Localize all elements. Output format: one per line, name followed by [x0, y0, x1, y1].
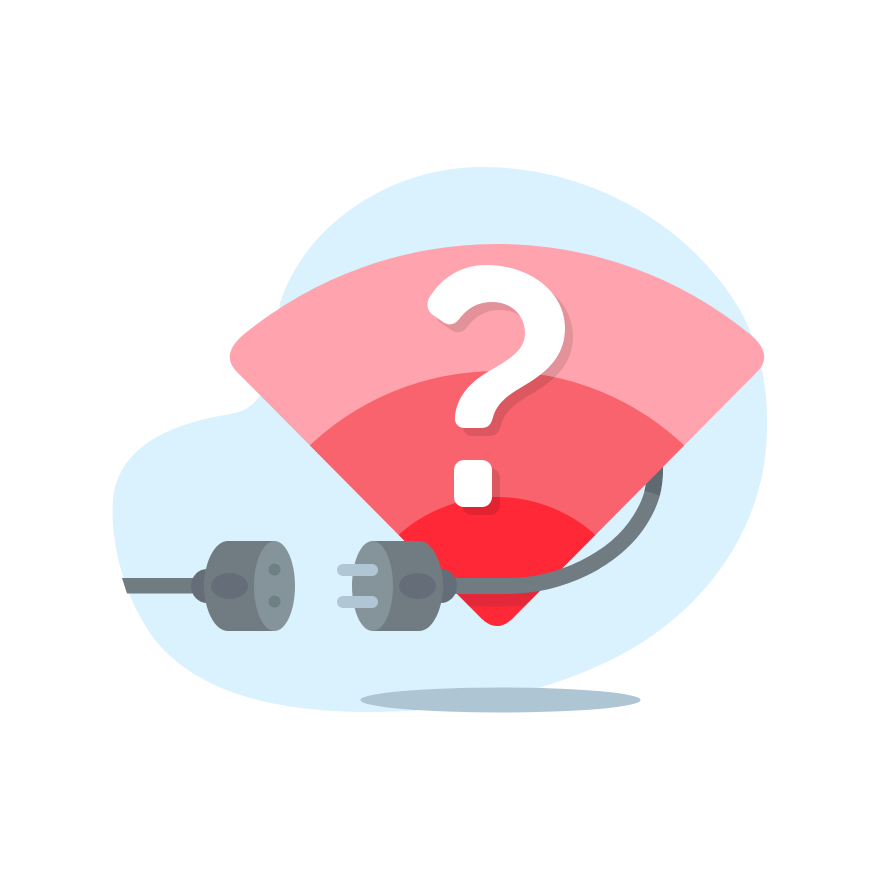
wifi signal wedge	[230, 244, 764, 626]
outer signal band	[230, 244, 764, 626]
cord section behind wedge	[540, 466, 664, 591]
right cord in front of wedge	[455, 550, 600, 594]
left cord	[122, 578, 195, 594]
plug face	[352, 541, 393, 631]
question mark shadow	[435, 273, 573, 515]
socket holes	[268, 564, 280, 576]
background blob	[113, 167, 767, 712]
cord shadow on wedge	[457, 591, 540, 606]
body oval	[211, 573, 248, 599]
illustration: unplugged wifi with question mark	[112, 167, 768, 712]
ground shadow	[360, 688, 640, 712]
socket face	[254, 541, 295, 631]
body	[204, 541, 274, 631]
body	[372, 541, 443, 631]
neck	[425, 569, 457, 603]
question mark	[427, 265, 565, 507]
pins	[337, 564, 378, 576]
inner signal band	[398, 497, 596, 626]
body oval	[399, 573, 436, 599]
right plug (pin end)	[337, 541, 457, 631]
middle signal band	[310, 371, 684, 626]
left plug (socket end)	[191, 541, 295, 631]
neck	[191, 569, 223, 603]
